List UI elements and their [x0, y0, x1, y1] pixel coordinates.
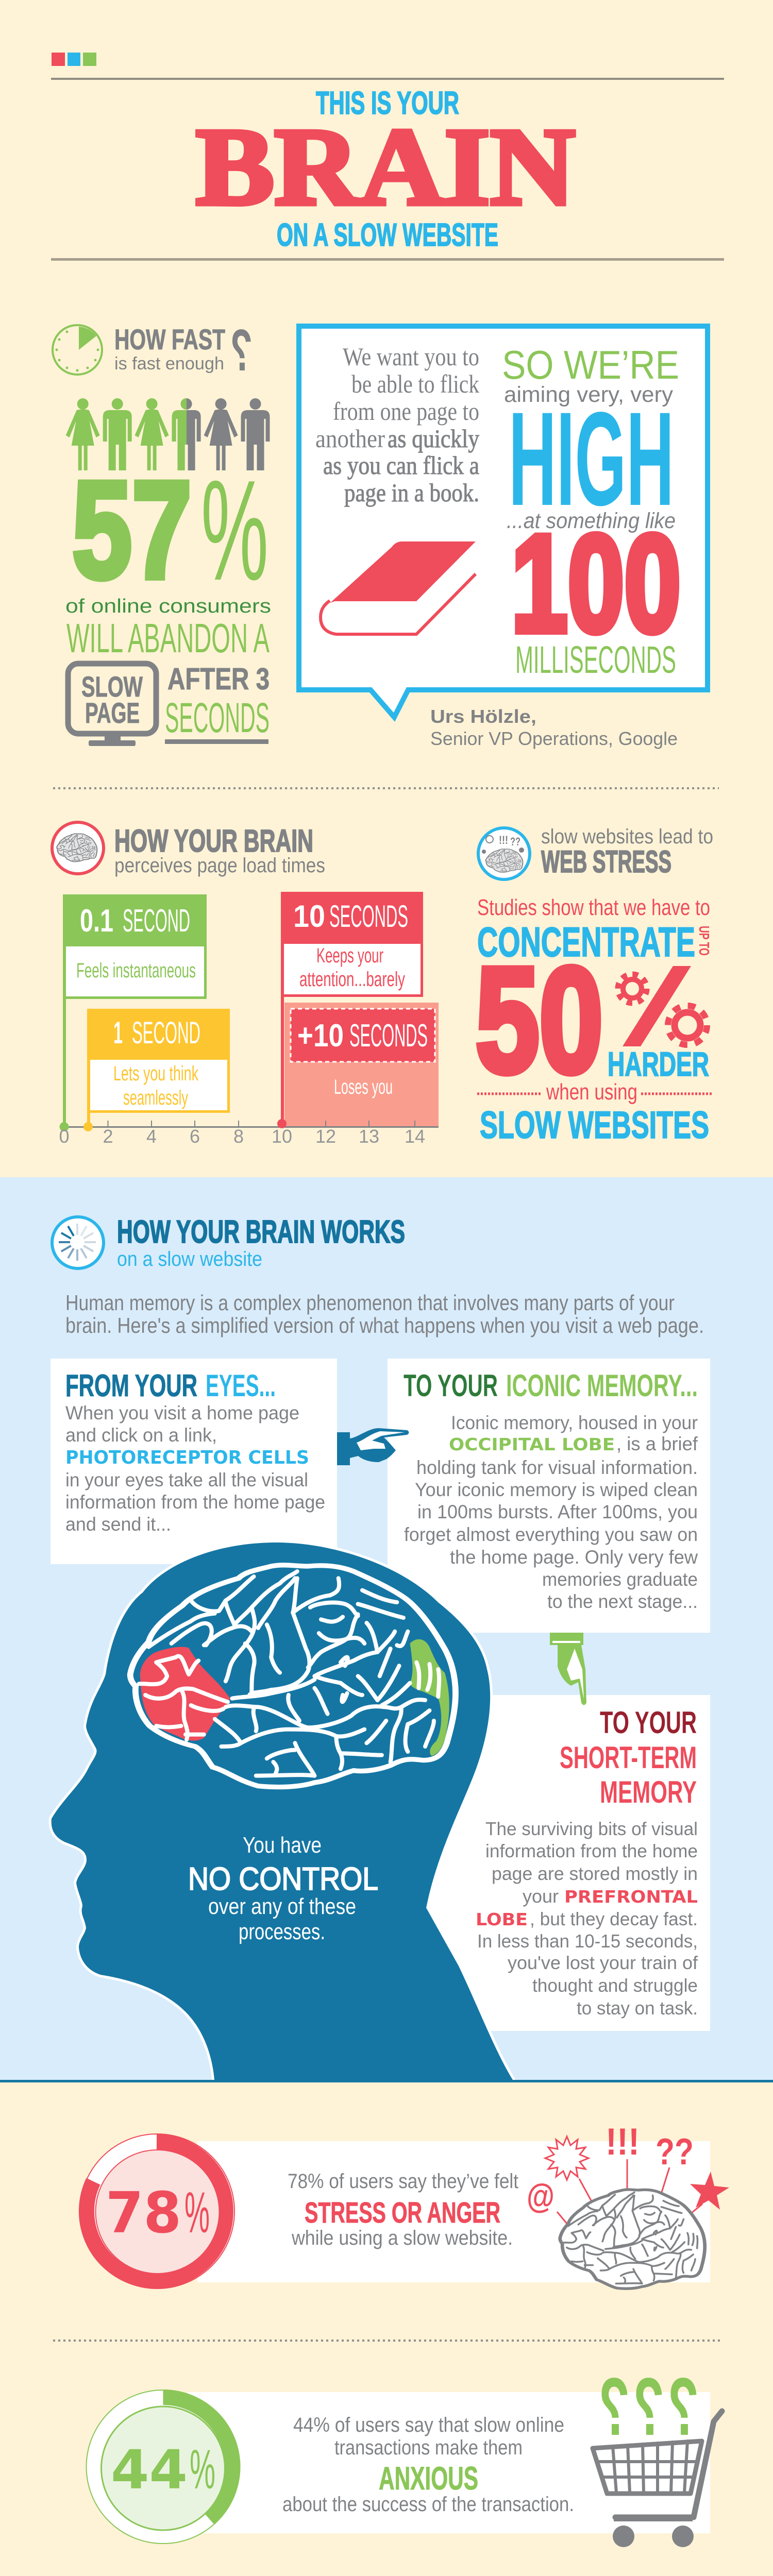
subheading: on a slow website: on a slow website	[117, 1248, 262, 1270]
panel: quote speech bubble	[299, 326, 708, 717]
title line: on a slow website: ON A SLOW WEBSITE	[277, 217, 498, 253]
stat: 57 percent: %	[201, 450, 268, 610]
flag: 10 seconds: 10	[293, 899, 325, 934]
card: to your short-term memory: MEMORY	[600, 1775, 697, 1809]
quote attribution: Senior VP Operations, Google	[430, 728, 678, 749]
stat text: ANXIOUS	[379, 2461, 478, 2497]
card: from your eyes: and click on a link,	[65, 1425, 217, 1446]
flag: +10 seconds loses you	[284, 1003, 439, 1126]
card: to your iconic memory: OCCIPITAL LOBE	[449, 1434, 615, 1454]
text: no control	[188, 1833, 378, 1944]
quote attribution: Urs Hölzle,	[430, 706, 536, 727]
donut chart: 44 percent: %	[190, 2438, 215, 2500]
icon: shopping cart with question marks	[593, 2361, 722, 2547]
quote text	[315, 342, 479, 507]
stat text: 44% of users say that slow online	[293, 2414, 564, 2436]
quote attribution	[430, 706, 678, 749]
text: up to: UP TO	[696, 926, 712, 956]
card: from your eyes: When you visit a home page	[65, 1402, 299, 1423]
icon: stressed brain	[527, 2121, 729, 2289]
chart axis: 0	[59, 1126, 70, 1147]
card: to your short-term memory: TO YOUR	[600, 1705, 697, 1740]
chart axis: 14	[405, 1126, 425, 1147]
card: from your eyes: and send it...	[65, 1514, 171, 1535]
quote text: page in a book.	[344, 478, 479, 507]
subheading: slow websites lead to: slow websites lead to	[541, 825, 713, 848]
card: to your short-term memory: your	[523, 1886, 559, 1907]
text: after 3: AFTER 3	[167, 662, 270, 696]
person 4: half green half grey	[172, 398, 201, 470]
chart axis: 10	[272, 1126, 292, 1147]
panel: how your brain perceives page load times	[52, 822, 439, 1147]
icon: spinner circle	[52, 1217, 104, 1268]
title line: brain: BRAIN	[196, 105, 575, 228]
panel: how your brain works	[0, 1177, 773, 2082]
card: to your iconic memory: the home page. Only very few	[450, 1547, 698, 1568]
donut chart: 78 percent: 78	[106, 2180, 181, 2246]
illustration: brain with highlighted lobes	[130, 1565, 456, 1787]
card: from your eyes	[51, 1359, 337, 1564]
card: to your iconic memory: memories graduate	[542, 1569, 698, 1590]
heading: how your brain works: HOW YOUR BRAIN WORKS	[117, 1214, 405, 1250]
icon: mirrored question mark: ?	[230, 318, 253, 383]
text: of online consumers: of online consumers	[65, 596, 271, 617]
text: 100: 100	[511, 506, 681, 660]
icon: monitor slow page: PAGE	[85, 697, 140, 729]
pictogram: six people	[66, 398, 270, 470]
heading: web stress: WEB STRESS	[541, 844, 671, 879]
icon: shopping cart with question marks: ?	[633, 2361, 664, 2453]
flag: 0.1 second: SECOND	[123, 903, 190, 939]
icon: pointing hand down	[550, 1633, 586, 1705]
quote text: another	[315, 424, 385, 453]
stat text	[282, 2414, 574, 2516]
text: at something like: ...at something like	[507, 509, 676, 533]
icon: red book	[321, 541, 476, 634]
person 1	[66, 398, 100, 470]
heading: how fast: HOW FAST	[114, 323, 225, 355]
chart axis: 13	[359, 1126, 379, 1147]
stat: 57 percent: 57	[72, 452, 192, 607]
flag: 10 seconds: SECONDS	[329, 899, 408, 934]
icon: stressed brain in blue circle: ??	[510, 835, 520, 848]
person 2	[103, 398, 132, 470]
panel: 44 percent anxious	[87, 2361, 722, 2547]
card: from your eyes: in your eyes take all the visual	[65, 1469, 308, 1490]
card: to your iconic memory: , is a brief	[616, 1433, 698, 1454]
icon: shopping cart with question marks: ?	[668, 2361, 699, 2453]
flag: 1 second: 1	[113, 1015, 123, 1050]
icon: shopping cart with question marks: ?	[599, 2361, 630, 2453]
person 5	[204, 398, 238, 470]
illustration: head silhouette	[52, 1543, 513, 2080]
text: no control: over any of these	[208, 1894, 356, 1919]
stat text	[288, 2170, 518, 2249]
percent slash	[623, 966, 691, 1046]
card: to your short-term memory: PREFRONTAL	[564, 1887, 698, 1907]
icon: brain in red circle	[52, 822, 104, 874]
card: to your iconic memory: Your iconic memory is wiped clean	[415, 1479, 698, 1500]
stat text: while using a slow website.	[291, 2227, 513, 2249]
icon: stressed brain: ??	[656, 2131, 694, 2173]
card: to your iconic memory: forget almost everything you saw on	[404, 1524, 698, 1545]
chart: timeline	[59, 892, 439, 1147]
card: to your short-term memory: thought and struggle	[532, 1975, 698, 1996]
card: to your short-term memory: SHORT-TERM	[560, 1740, 697, 1775]
icon: small gear	[618, 974, 647, 1003]
section background	[0, 1177, 773, 2080]
text: no control: You have	[243, 1833, 322, 1858]
flag: 0.1 second: 0.1	[80, 903, 113, 939]
text: aiming very, very: aiming very, very	[504, 382, 673, 407]
icon: monitor slow page	[68, 664, 156, 746]
card: to your short-term memory: information from the home	[485, 1840, 698, 1861]
frontal lobe in red	[140, 1647, 230, 1741]
flag: 1 second: SECOND	[132, 1015, 200, 1050]
stat: 50 percent with gears: 50	[476, 937, 603, 1104]
card: from your eyes: information from the home page	[65, 1492, 325, 1513]
quote text: We want you to	[343, 342, 479, 371]
flag: +10 seconds loses you: Loses you	[334, 1076, 393, 1098]
card: to your iconic memory: TO YOUR	[404, 1368, 498, 1403]
text: harder: HARDER	[608, 1045, 709, 1083]
stat text: about the success of the transaction.	[282, 2493, 574, 2516]
chart axis: 4	[146, 1126, 157, 1147]
donut chart: 44 percent	[87, 2390, 240, 2544]
chart axis: 2	[103, 1126, 113, 1147]
card: from your eyes: PHOTORECEPTOR CELLS	[65, 1447, 309, 1468]
icon: stressed brain: @	[527, 2177, 554, 2215]
card: from your eyes: FROM YOUR	[65, 1368, 197, 1403]
card: to your short-term memory: In less than 10-15 seconds,	[477, 1930, 698, 1952]
chart axis: 6	[190, 1126, 200, 1147]
title	[196, 86, 575, 253]
card: to your short-term memory	[412, 1695, 710, 2031]
heading: how your brain: HOW YOUR BRAIN	[114, 823, 313, 858]
card: to your iconic memory: in 100ms bursts. After 100ms, you	[417, 1501, 698, 1522]
stat text: transactions make them	[334, 2436, 523, 2459]
text: so we're: SO WE’RE	[502, 342, 679, 387]
icon: clock	[53, 325, 102, 375]
card: to your short-term memory: to stay on task.	[577, 1997, 698, 2019]
subheading: is fast enough: is fast enough	[114, 354, 224, 374]
panel: web stress	[476, 825, 713, 1146]
card: to your short-term memory: The surviving bits of visual	[485, 1818, 698, 1839]
flag: 1 second: Lets you think	[113, 1062, 199, 1085]
icon: large gear	[668, 1006, 707, 1045]
icon: pointing hand right	[337, 1428, 409, 1465]
panel: how fast is fast enough	[53, 318, 271, 746]
person 6	[241, 398, 270, 470]
card: to your iconic memory: Iconic memory, housed in your	[451, 1412, 698, 1433]
chart axis	[59, 1119, 439, 1147]
flag: 10 seconds: Keeps your	[316, 944, 383, 967]
header: colour swatches	[52, 53, 96, 66]
card: to your iconic memory: holding tank for visual information.	[416, 1457, 698, 1478]
card: to your short-term memory: you've lost your train of	[508, 1952, 698, 1973]
icon: stressed brain: !!!	[606, 2121, 640, 2163]
card: to your iconic memory: to the next stage...	[547, 1591, 698, 1612]
donut chart: 78 percent	[80, 2134, 234, 2289]
flag: 0.1 second: Feels instantaneous	[76, 959, 196, 982]
flag: 1 second	[87, 1009, 230, 1126]
quote text: as quickly	[388, 424, 479, 453]
panel: 78 percent stress or anger	[80, 2121, 729, 2289]
flag: +10 seconds loses you: +10	[297, 1018, 344, 1054]
card: to your short-term memory: LOBE	[476, 1909, 528, 1929]
chart axis: 12	[315, 1126, 336, 1147]
title line: this is your: THIS IS YOUR	[316, 86, 459, 121]
text: when using: when using	[546, 1079, 637, 1105]
icon: stressed brain in blue circle: !!!	[499, 834, 508, 846]
text: no control: NO CONTROL	[188, 1861, 378, 1897]
flag: +10 seconds loses you: SECONDS	[349, 1018, 428, 1054]
speech bubble frame	[299, 326, 708, 717]
flag: 10 seconds: attention...barely	[299, 968, 405, 991]
card: from your eyes: EYES...	[206, 1368, 276, 1403]
subheading: perceives page load times: perceives page load times	[114, 854, 325, 877]
icon: stressed brain in blue circle	[478, 828, 530, 879]
occipital lobe in green	[410, 1639, 449, 1756]
flag: 0.1 second	[63, 894, 207, 1126]
text: seconds: SECONDS	[165, 694, 270, 741]
intro text	[65, 1291, 704, 1337]
stat text: 78% of users say they’ve felt	[288, 2170, 518, 2193]
card: to your short-term memory: page are stored mostly in	[492, 1863, 698, 1884]
icon: monitor slow page: SLOW	[81, 670, 143, 703]
stat text: STRESS OR ANGER	[305, 2196, 500, 2229]
donut chart: 78 percent: %	[184, 2180, 210, 2245]
text: will abandon a: WILL ABANDON A	[66, 615, 270, 661]
card: to your short-term memory: , but they decay fast.	[530, 1908, 698, 1929]
flag: 1 second: seamlessly	[123, 1087, 188, 1109]
person 3	[135, 398, 169, 470]
text: no control: processes.	[239, 1919, 325, 1944]
donut chart: 44 percent: 44	[111, 2438, 188, 2501]
text: studies show: Studies show that we have to	[477, 895, 710, 920]
card: to your iconic memory	[388, 1359, 710, 1633]
flag: 10 seconds	[281, 892, 423, 1126]
quote text: from one page to	[333, 397, 479, 426]
quote text: as you can flick a	[323, 451, 479, 480]
chart axis: 8	[233, 1126, 244, 1147]
intro text: Human memory is a complex phenomenon that involves many parts of your	[65, 1291, 675, 1315]
quote text: be able to flick	[351, 369, 479, 398]
